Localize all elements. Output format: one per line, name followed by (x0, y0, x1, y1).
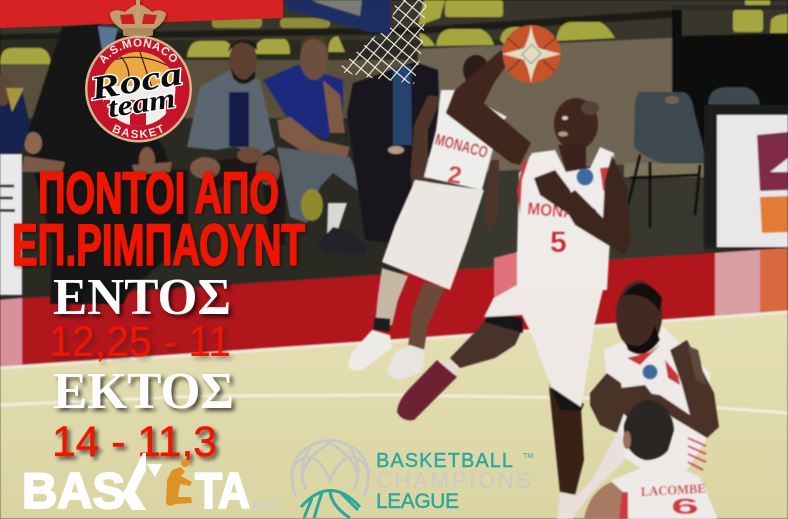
bench: player in blue jersey (263, 36, 367, 255)
player number 2 behind: MONACO (433, 131, 490, 162)
jersey name: LACOMBE (640, 481, 706, 499)
arm (410, 95, 442, 215)
wordmark A: A (218, 463, 250, 519)
script wordmark team: team (106, 83, 178, 124)
label: away: ΕΚΤΟΣ (53, 363, 234, 420)
jersey number: 6 (671, 494, 699, 519)
logo: basketa.gr (22, 453, 278, 519)
court lines (0, 312, 788, 368)
basket label: BASKET (112, 124, 163, 138)
word CHAMPIONS: CHAMPIONS (376, 468, 531, 493)
word LEAGUE: LEAGUE (376, 490, 459, 513)
headline line 2: ΕΠ.ΡΙΜΠΑΟΥΝΤ (12, 213, 305, 278)
raised sock (438, 358, 458, 380)
third player, teammate (557, 281, 719, 519)
white courtside board left (0, 154, 22, 295)
LED advertising board (704, 105, 788, 248)
team logo: Roca Team (85, 0, 192, 142)
black scoring panel (672, 33, 788, 150)
headline line 1: ΠΟΝΤΟΙ ΑΠΟ (38, 161, 279, 226)
orange ball (104, 52, 172, 86)
head (616, 281, 662, 351)
hand (534, 170, 575, 212)
main player number 5 (397, 50, 631, 519)
bench: coach in dark suit (22, 24, 188, 304)
raised arm (446, 50, 531, 165)
head (463, 55, 489, 85)
shorts (484, 273, 607, 407)
jersey (612, 460, 717, 519)
arm (627, 340, 719, 438)
head (624, 400, 674, 460)
label: home: ΕΝΤΟΣ (53, 269, 231, 326)
arm (584, 482, 624, 519)
maroon shoe (397, 360, 457, 420)
floor under bench (418, 162, 704, 280)
shoes (348, 330, 392, 370)
beige courtside wall (418, 38, 672, 175)
head (554, 98, 598, 150)
jersey (604, 323, 710, 480)
raised thigh (450, 322, 522, 368)
wordmark T: T (195, 463, 222, 519)
crown (110, 0, 166, 36)
script wordmark Roca: Roca (87, 56, 185, 108)
legs (375, 268, 408, 325)
red court band (0, 248, 788, 368)
player number 2 behind (348, 55, 507, 380)
icon: orange jumping player (166, 459, 192, 506)
lower jersey (557, 427, 625, 519)
basketball (502, 25, 561, 83)
wordmark BAS: BAS (22, 463, 125, 519)
player number 2 behind: 2 (446, 161, 464, 190)
stripes (130, 100, 146, 126)
wood court floor (0, 312, 788, 519)
basketball net (338, 0, 427, 84)
stand seats (0, 0, 788, 64)
stands wall left (0, 60, 420, 118)
club name: A.S.MONACO (100, 38, 178, 64)
fourth player, back view (584, 400, 717, 519)
away values: 14 - 11,3 (52, 418, 217, 466)
bench: left seated player (0, 74, 30, 160)
standing leg (549, 387, 584, 519)
icon: grey globe (291, 440, 369, 497)
home values: 12,25 - 11 (49, 318, 231, 366)
jersey lettering: MONACO (527, 199, 598, 224)
hem stripes (688, 438, 706, 470)
jersey (517, 147, 614, 292)
trademark: TM (523, 453, 533, 460)
bench: player with grey towel (187, 40, 285, 245)
number 5: 5 (550, 226, 567, 259)
suffix GR: GR (252, 497, 278, 514)
right arm (560, 155, 631, 255)
blue chair (628, 87, 760, 228)
red backboard bar (0, 0, 283, 28)
right arm (484, 160, 499, 232)
letter K with hoop (122, 453, 162, 510)
medallion (642, 364, 658, 380)
hands (590, 373, 625, 433)
word BASKETBALL: BASKETBALL (376, 450, 513, 472)
shorts (382, 180, 484, 290)
jersey (424, 90, 507, 190)
backboard frame (283, 0, 390, 35)
headline (12, 161, 305, 278)
stands top strip (0, 0, 788, 40)
icon: teal ball (301, 489, 360, 518)
dark rail (0, 10, 672, 40)
logo: Basketball Champions League (291, 440, 533, 518)
bench: man in black suit (347, 62, 440, 245)
badge circle (85, 36, 192, 142)
